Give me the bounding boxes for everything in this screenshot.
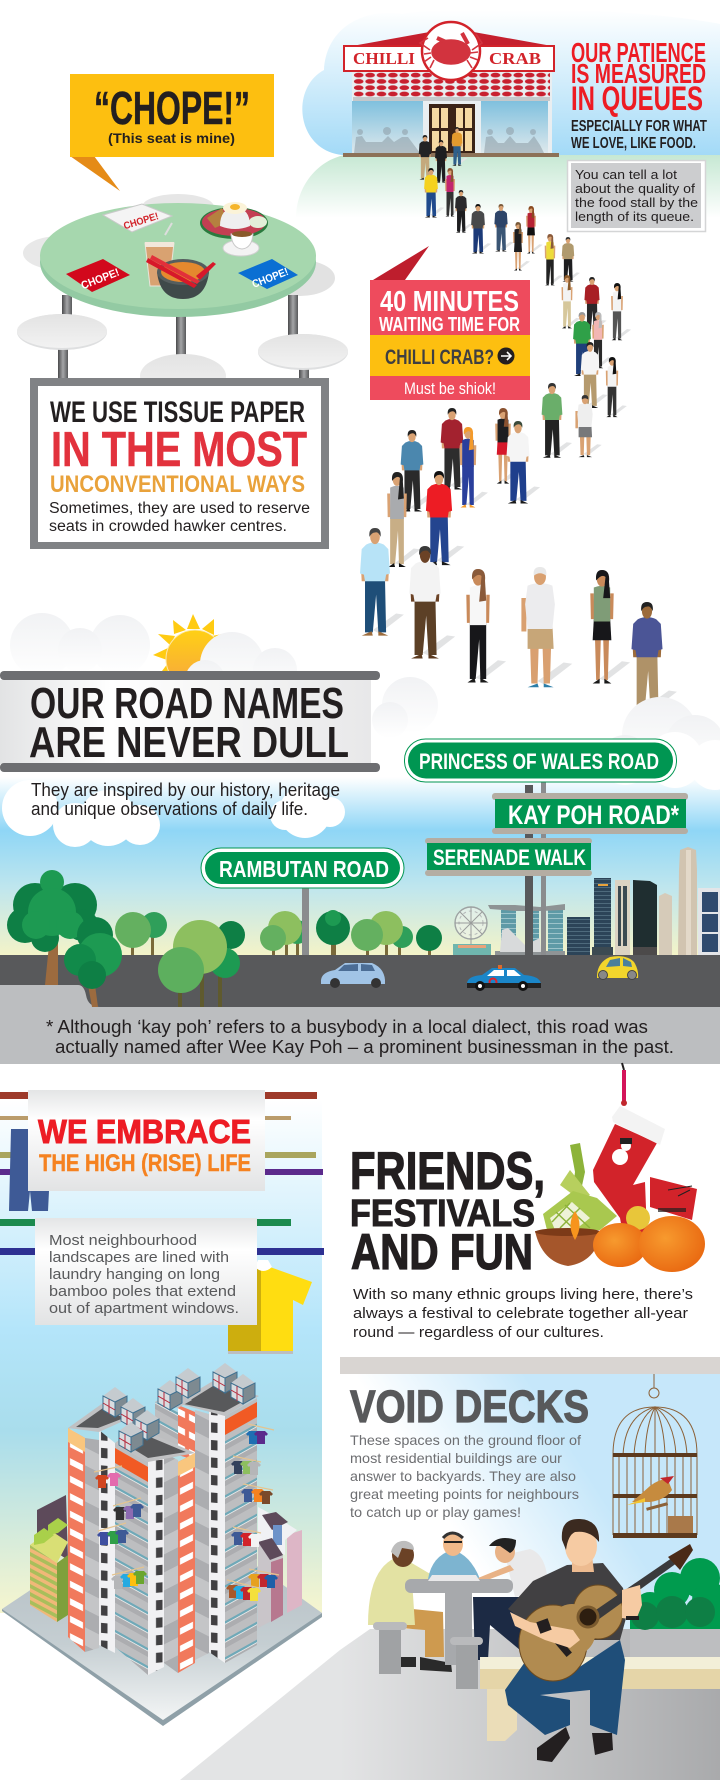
footnote band xyxy=(0,985,720,1064)
sign: princess of wales road: PRINCESS OF WALES ROAD xyxy=(419,749,659,774)
icon: yellow car xyxy=(597,956,638,980)
icon: silver car xyxy=(321,963,385,988)
illustration: festive items xyxy=(535,1063,705,1272)
panel: laundry text: Most neighbourhood xyxy=(49,1233,197,1249)
signpost: rambutan road xyxy=(201,848,404,955)
callout: 40 minutes: Must be shiok! xyxy=(404,380,496,398)
icon: bush xyxy=(630,1558,720,1630)
torso xyxy=(508,1563,628,1640)
icon: red packet xyxy=(650,1177,697,1220)
panel: road sky xyxy=(0,777,720,957)
panel: laundry text: laundry hanging on long xyxy=(49,1267,220,1283)
icon: sun xyxy=(153,614,224,688)
heading: void decks: VOID DECKS xyxy=(350,1381,589,1432)
sign: princess of wales road xyxy=(404,739,676,782)
text block: festivals: With so many ethnic groups living here, there’s xyxy=(353,1286,693,1303)
tissue packet: blue xyxy=(238,259,298,291)
icon: ketupat xyxy=(543,1143,617,1230)
tree: large xyxy=(7,870,98,985)
heading: friends, festivals and fun: AND FUN xyxy=(351,1224,533,1280)
text block: void decks: These spaces on the ground floor of xyxy=(350,1432,581,1448)
sign: serenade walk xyxy=(425,838,592,876)
panel: laundry text xyxy=(35,1218,257,1325)
block: small pink xyxy=(258,1507,302,1628)
text block: road names intro: and unique observations of daily life. xyxy=(31,799,308,819)
icon: taxi xyxy=(467,965,541,991)
callout: queue quality note: length of its queue. xyxy=(575,209,694,224)
callout: queue quality note xyxy=(568,160,706,232)
heading: friends, festivals and fun: FRIENDS, xyxy=(350,1142,545,1201)
backdrop: green hill xyxy=(296,155,720,218)
ground platform xyxy=(2,1500,322,1723)
background trees xyxy=(115,910,442,955)
heading: tissue paper: WE USE TISSUE PAPER xyxy=(50,396,305,429)
callout: chope speech bubble xyxy=(70,74,274,191)
rooftop huts xyxy=(103,1363,255,1452)
panel: chope table illustration xyxy=(17,194,348,398)
icon: bird xyxy=(627,1476,674,1511)
right arm and hand xyxy=(622,1585,642,1620)
panel: laundry text: bamboo poles that extend xyxy=(49,1284,236,1300)
shop sign lettering: CRAB xyxy=(489,49,541,68)
footnote band: actually named after Wee Kay Poh – a prominent businessman in the past. xyxy=(55,1036,674,1057)
food: iced drink xyxy=(145,223,174,286)
clouds: upper road section xyxy=(10,613,720,785)
illustration: isometric housing blocks xyxy=(2,1363,322,1726)
person: guitarist xyxy=(505,1519,693,1762)
tissue packet: red xyxy=(66,259,130,292)
icon: oil lamp xyxy=(535,1211,602,1266)
text block: void decks: to catch up or play games! xyxy=(350,1504,521,1520)
road surface xyxy=(0,955,720,1008)
callout: queue quality note: the food stall by the xyxy=(575,195,698,210)
text block: road names intro xyxy=(31,780,340,819)
heading: in the most: IN THE MOST xyxy=(51,423,307,477)
bench xyxy=(480,1657,720,1741)
illustration: stone table and stools xyxy=(368,1532,548,1689)
block: small green xyxy=(30,1495,68,1622)
text block: festivals xyxy=(353,1286,693,1341)
text block: void decks: most residential buildings are our xyxy=(350,1450,562,1466)
body text: tissue xyxy=(49,500,310,535)
bamboo laundry poles xyxy=(0,1092,324,1255)
icon: yellow shirt xyxy=(228,1260,312,1354)
signpost: three street signs xyxy=(404,739,688,955)
tree: medium xyxy=(64,917,122,1007)
callout: queue quality note: You can tell a lot xyxy=(575,167,677,182)
guitar xyxy=(519,1544,693,1681)
panel: we embrace heading: THE HIGH (RISE) LIFE xyxy=(39,1150,251,1177)
person: old man xyxy=(368,1541,452,1672)
head xyxy=(562,1519,599,1572)
jeans xyxy=(505,1640,625,1735)
heading: friends, festivals and fun xyxy=(350,1142,545,1280)
food: noodle bowl xyxy=(146,255,216,299)
foreground trees xyxy=(7,870,245,1007)
tissue packet: white xyxy=(103,204,172,232)
footnote band: * Although ‘kay poh’ refers to a busybody in a local dialect, this road was xyxy=(46,1016,648,1037)
left forearm and hand xyxy=(510,1612,580,1648)
callout: 40 minutes xyxy=(370,246,530,400)
text block: void decks: answer to backyards. They are also xyxy=(350,1468,576,1484)
heading: unconventional ways: UNCONVENTIONAL WAYS xyxy=(50,471,305,498)
tissue packet: red: CHOPE! xyxy=(80,267,121,292)
body text: tissue: Sometimes, they are used to reserve xyxy=(49,500,310,517)
tissue packet: white: CHOPE! xyxy=(122,211,160,232)
illustration: queue of people xyxy=(360,127,677,714)
icon: chilli crab shop xyxy=(343,22,559,157)
shop sign lettering: CHILLI xyxy=(353,49,415,68)
illustration: skyline xyxy=(453,847,720,956)
callout: 40 minutes: 40 MINUTES xyxy=(380,286,519,318)
icon: crab xyxy=(420,33,482,68)
panel: laundry text: landscapes are lined with xyxy=(49,1250,229,1266)
signpost: rambutan road: RAMBUTAN ROAD xyxy=(219,856,389,882)
callout: chope speech bubble: “CHOPE!” xyxy=(94,82,250,134)
icon: bird cage xyxy=(613,1374,697,1538)
text block: void decks xyxy=(350,1432,581,1520)
panel: tissue paper text box xyxy=(30,378,329,549)
callout: chope speech bubble: (This seat is mine) xyxy=(108,130,235,146)
icon: christmas stocking xyxy=(593,1106,665,1257)
food: rice plate xyxy=(200,202,268,239)
text block: void decks: great meeting points for neighbours xyxy=(350,1486,579,1502)
text block: festivals: always a festival to celebrate together all-year xyxy=(353,1305,688,1322)
panel: we embrace heading: WE EMBRACE xyxy=(38,1113,251,1150)
landmark: marina bay sands xyxy=(488,904,565,956)
sign: serenade walk: SERENADE WALK xyxy=(433,845,586,870)
panel: laundry text: out of apartment windows. xyxy=(49,1301,239,1317)
body text: tissue: seats in crowded hawker centres. xyxy=(49,518,287,535)
text block: festivals: round — regardless of our cultures. xyxy=(353,1324,604,1341)
food: tea cup xyxy=(223,231,259,256)
tissue packet: blue: CHOPE! xyxy=(250,266,290,291)
icon: arrow xyxy=(498,348,514,364)
icon: mandarin oranges xyxy=(593,1216,705,1272)
floor: void deck xyxy=(180,1629,720,1780)
callout: 40 minutes: CHILLI CRAB? xyxy=(385,346,494,369)
heading: our road names are never dull xyxy=(0,671,380,772)
shop sign lettering xyxy=(353,49,541,68)
landmark: ferris wheel xyxy=(453,907,491,956)
heading: our road names are never dull: OUR ROAD NAMES xyxy=(30,679,344,728)
heading: our road names are never dull: ARE NEVER DULL xyxy=(29,718,349,767)
backdrop: blue cloud behind shop xyxy=(302,9,720,155)
text block: road names intro: They are inspired by our history, heritage xyxy=(31,780,340,800)
laundry clusters on the blocks xyxy=(94,1424,279,1601)
callout: queue quality note: about the quality of xyxy=(575,181,695,196)
person: man with glasses xyxy=(428,1532,480,1579)
block: back-right tower xyxy=(155,1381,259,1663)
heading: our patience is measured in queues xyxy=(571,37,707,152)
sign: kay poh road xyxy=(492,793,688,834)
icon: hanging jeans xyxy=(9,1129,49,1211)
icon: stocking hook and ribbon xyxy=(621,1063,627,1106)
callout: 40 minutes: WAITING TIME FOR xyxy=(379,314,520,336)
cloud: over sun xyxy=(185,632,297,700)
block: front-left tower xyxy=(68,1403,195,1675)
sign: kay poh road: KAY POH ROAD* xyxy=(508,800,679,830)
panel: high-rise sky xyxy=(0,1088,322,1613)
clouds: white around intro text xyxy=(2,732,720,847)
panel: we embrace heading xyxy=(28,1090,265,1191)
panel: void decks background xyxy=(340,1357,720,1644)
shoes xyxy=(537,1727,613,1762)
heading: friends, festivals and fun: FESTIVALS xyxy=(350,1193,535,1235)
person: man in white shirt xyxy=(473,1538,548,1660)
